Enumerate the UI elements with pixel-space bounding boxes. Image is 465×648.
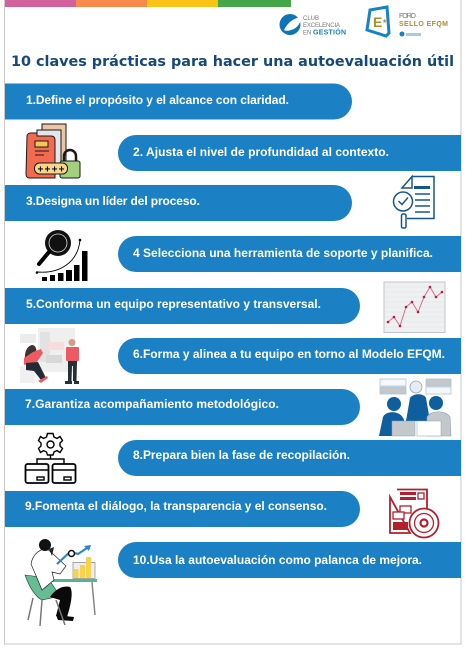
illustration: two people at a board bbox=[20, 328, 79, 384]
title: 10 claves prácticas para hacer una autoevaluación útil bbox=[11, 54, 454, 70]
illustration: team with laptops bbox=[379, 379, 451, 436]
icon: folder and padlock: ++++ bbox=[38, 164, 65, 176]
key 6 bar: 6.Forma y alinea a tu equipo en torno al Modelo EFQM. bbox=[133, 347, 445, 361]
logo: Foro Sello EFQM: SELLO EFQM bbox=[399, 21, 448, 28]
key 9 bar: 9.Fomenta el diálogo, la transparencia y el consenso. bbox=[25, 499, 327, 513]
key 1 bar bbox=[5, 84, 352, 120]
logo: Club Excelencia en Gestión bbox=[280, 14, 346, 36]
key 3 bar: 3.Designa un líder del proceso. bbox=[26, 194, 200, 208]
logo: Foro Sello EFQM bbox=[367, 7, 448, 36]
logo: Club Excelencia en Gestión: GESTIÓN bbox=[313, 28, 346, 36]
key 4 bar: 4 Selecciona una herramienta de soporte y planifica. bbox=[133, 246, 433, 260]
icon: magnifier and rising bars bbox=[36, 230, 88, 281]
logo: Club Excelencia en Gestión: EXCELENCIA bbox=[303, 23, 340, 29]
key 3 bar bbox=[5, 185, 352, 221]
line chart bbox=[384, 282, 445, 332]
key 9 bar bbox=[5, 491, 360, 527]
icon: document review bbox=[394, 176, 434, 228]
key 2 bar: 2. Ajusta el nivel de profundidad al contexto. bbox=[133, 145, 389, 159]
icon: gear and folders bbox=[26, 434, 76, 483]
key 8 bar bbox=[118, 440, 461, 476]
key 5 bar: 5.Conforma un equipo representativo y transversal. bbox=[26, 297, 321, 311]
key 7 bar bbox=[5, 389, 360, 425]
key 8 bar: 8.Prepara bien la fase de recopilación. bbox=[133, 448, 350, 462]
key 6 bar bbox=[118, 338, 461, 374]
key 1 bar: 1.Define el propósito y el alcance con claridad. bbox=[26, 93, 289, 107]
icon: red document and disc bbox=[390, 490, 438, 538]
illustration: analyst at desk bbox=[25, 539, 97, 626]
key 7 bar: 7.Garantiza acompañamiento metodológico. bbox=[25, 397, 279, 411]
key 10 bar: 10.Usa la autoevaluación como palanca de mejora. bbox=[133, 553, 422, 567]
logo: Club Excelencia en Gestión: CLUB bbox=[303, 16, 319, 22]
logo: Club Excelencia en Gestión: EN bbox=[303, 30, 311, 36]
icon: folder and padlock bbox=[26, 124, 80, 178]
key 2 bar bbox=[118, 135, 461, 171]
key 5 bar bbox=[5, 288, 360, 324]
key 4 bar bbox=[118, 236, 461, 272]
logo: Foro Sello EFQM: FORO bbox=[399, 13, 417, 20]
logo: Foro Sello EFQM: ★ bbox=[382, 18, 387, 25]
key 10 bar bbox=[118, 542, 461, 578]
logo: Foro Sello EFQM: E bbox=[373, 14, 382, 30]
colour strip bbox=[5, 0, 291, 7]
